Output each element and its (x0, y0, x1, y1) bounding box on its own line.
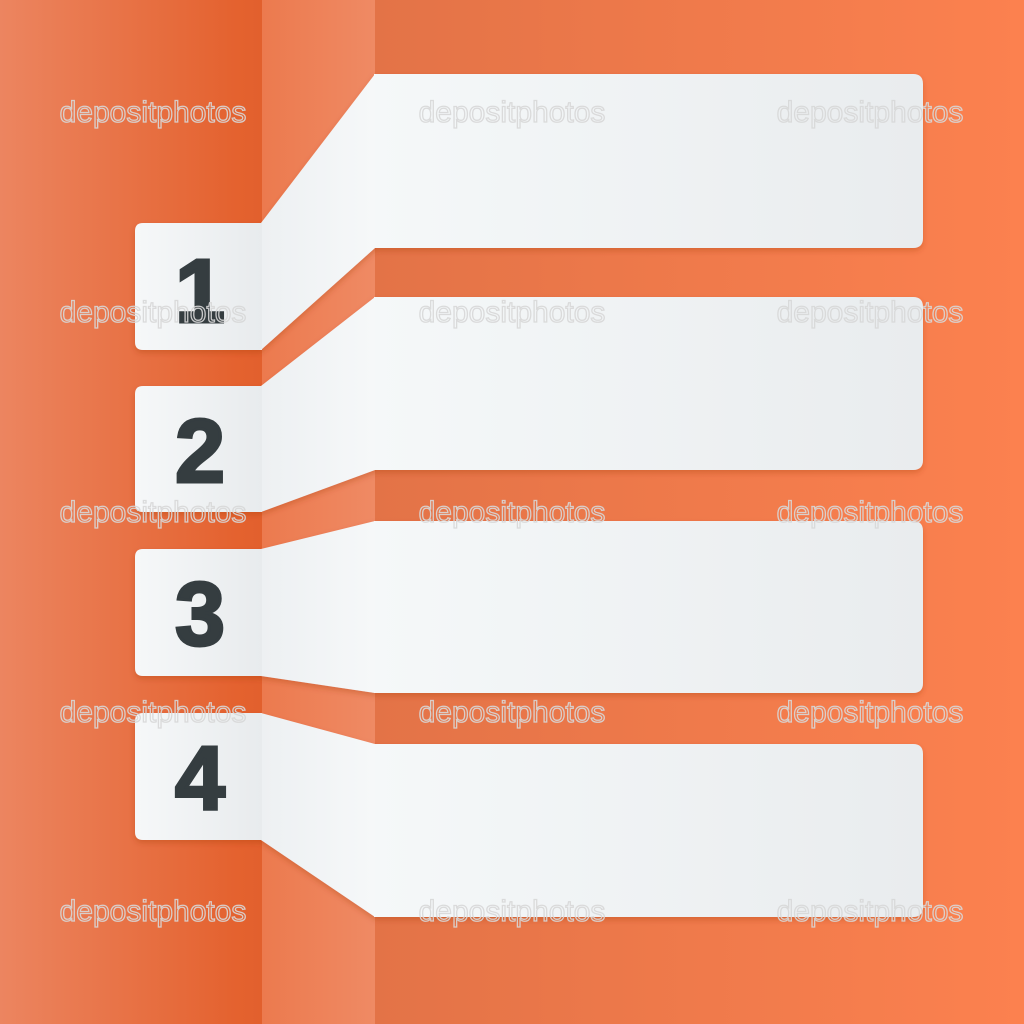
card 2 (135, 297, 923, 512)
watermarks: depositphotos (419, 296, 605, 329)
watermarks: depositphotos (60, 96, 246, 129)
number 3: 3 (175, 565, 225, 665)
watermarks: depositphotos (60, 496, 246, 529)
watermarks (60, 96, 963, 928)
number 1: 1 (175, 242, 225, 342)
card 4 (135, 713, 923, 917)
watermarks: depositphotos (60, 895, 246, 928)
watermarks: depositphotos (777, 895, 963, 928)
watermarks: depositphotos (777, 96, 963, 129)
watermarks: depositphotos (60, 296, 246, 329)
watermarks: depositphotos (419, 496, 605, 529)
number 2: 2 (175, 402, 225, 502)
watermarks: depositphotos (777, 496, 963, 529)
card 3 (135, 521, 923, 693)
card 1 (135, 74, 923, 350)
watermarks: depositphotos (419, 696, 605, 729)
watermarks: depositphotos (419, 895, 605, 928)
watermarks: depositphotos (419, 96, 605, 129)
watermarks: depositphotos (777, 696, 963, 729)
number 4: 4 (175, 729, 225, 829)
watermarks: depositphotos (60, 696, 246, 729)
watermarks: depositphotos (777, 296, 963, 329)
